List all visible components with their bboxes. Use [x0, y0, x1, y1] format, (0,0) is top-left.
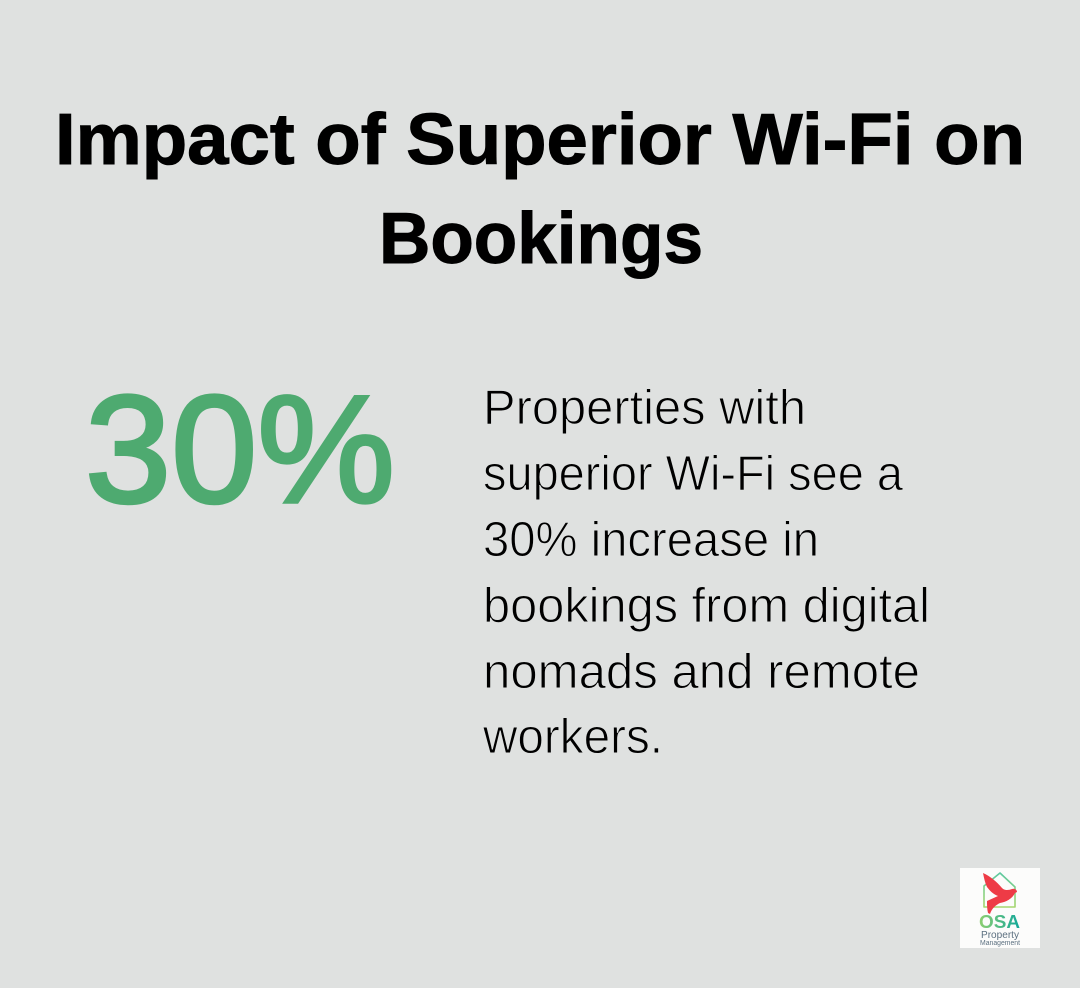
icon: house outline — [984, 873, 1015, 907]
statistic: 30%: 30% — [85, 364, 395, 535]
description text: superior Wi-Fi see a — [483, 447, 904, 501]
description text: nomads and remote — [483, 645, 920, 699]
logo text: Property: Property — [981, 930, 1019, 941]
description text: 30% increase in — [483, 513, 819, 567]
title: Impact of Superior Wi-Fi on — [55, 100, 1025, 180]
title: Bookings — [379, 199, 703, 279]
description text: bookings from digital — [483, 579, 930, 633]
logo wordmark: OSA: OSA — [979, 912, 1020, 932]
icon: red bird — [983, 873, 1017, 914]
description text: workers. — [482, 710, 663, 764]
logo text: Management: Management — [980, 940, 1020, 947]
description text — [482, 381, 930, 764]
description text: Properties with — [483, 381, 806, 435]
title — [55, 100, 1025, 279]
logo: OSA Property Management — [960, 868, 1040, 948]
